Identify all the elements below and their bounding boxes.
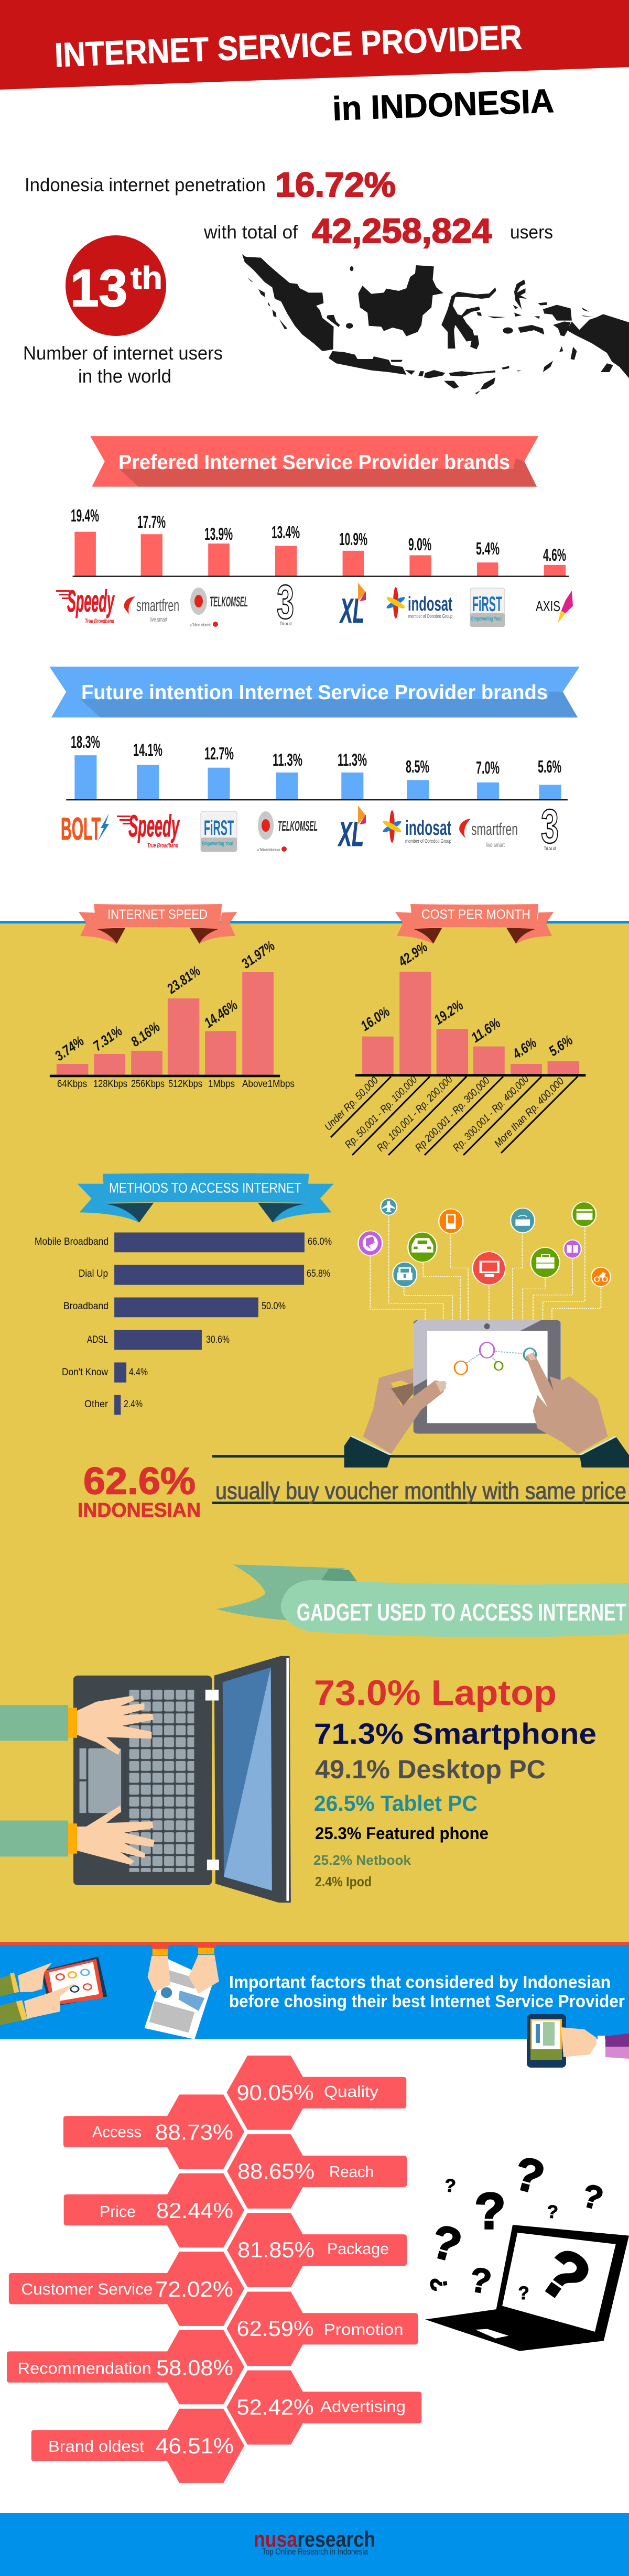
total users statistic: users [510, 221, 553, 243]
icon: briefcase [530, 1247, 560, 1277]
illustration: laptop with question marks: ? [527, 2233, 603, 2318]
yellow background panel [0, 923, 629, 1942]
ribbon: cost per month [395, 904, 554, 944]
hexagon factors: left column: 46.51% [156, 2433, 234, 2458]
illustration: laptop with question marks: ? [578, 2177, 607, 2218]
illustration: laptop with question marks: ? [426, 2214, 467, 2272]
bar chart: preferred brands [71, 506, 569, 577]
ribbon: cost per month: COST PER MONTH [421, 907, 530, 922]
penetration statistic [25, 165, 396, 204]
illustration: laptop with question marks: ? [509, 2146, 550, 2204]
bar chart: future intention: 5.6% [538, 757, 561, 776]
gadget usage list: 25.3% Featured phone [315, 1824, 489, 1843]
illustration: hands on report [145, 1945, 219, 2039]
footer [0, 2513, 629, 2576]
ribbon: gadget used [216, 1564, 629, 1637]
bar chart: internet speed: Above1Mbps [242, 1079, 295, 1090]
bar chart: preferred brands: 10.9% [339, 529, 367, 549]
rank badge: th [131, 260, 162, 296]
bar chart: access methods: 30.6% [206, 1334, 230, 1345]
bar chart: access methods: Dial Up [79, 1268, 108, 1279]
gadget usage list: 25.2% Netbook [313, 1852, 411, 1868]
right hand [526, 1352, 629, 1468]
tablet body [413, 1320, 561, 1434]
red divider line [0, 1942, 629, 1945]
hexagon factors: left column: 82.44% [156, 2198, 233, 2223]
logo: Speedy [56, 584, 115, 625]
brand logos row 2: TELKOMSEL [278, 818, 318, 834]
hexagon factors: right column [226, 2056, 421, 2444]
title line 1: INTERNET SERVICE PROVIDER [54, 18, 523, 74]
bar chart: future intention [66, 732, 568, 800]
bar chart: access methods: 65.8% [307, 1268, 330, 1279]
title banner [0, 0, 629, 127]
illustration: hand holding phone [527, 2014, 629, 2068]
bar chart: internet speed: 512Kbps [168, 1079, 202, 1090]
logo: Telkomsel [257, 811, 318, 852]
logo: smartfren [459, 819, 518, 849]
logo: Bolt: BOLT [61, 811, 101, 846]
logo: Indosat: member of Ooredoo Group [405, 839, 451, 844]
bar chart: internet speed: 1Mbps [208, 1079, 235, 1090]
logo: Speedy: True Broadband [85, 617, 114, 625]
blue divider line [0, 921, 629, 923]
logo: Speedy [117, 809, 180, 849]
bar chart: internet speed: 3.74% [52, 1033, 87, 1064]
bar chart: access methods: Mobile Broadband [35, 1236, 109, 1247]
left hand [344, 1368, 447, 1468]
hexagon factors: left column: 88.73% [155, 2120, 233, 2145]
gadget usage list: 73.0% Laptop [314, 1673, 557, 1713]
bar chart: access methods: Other [84, 1399, 109, 1410]
voucher statistic: 62.6% [83, 1460, 196, 1502]
banner heading: Important factors that considered by Indonesian [229, 1972, 611, 1992]
gadget usage list [313, 1673, 597, 1889]
brand logos row 1 [56, 575, 573, 630]
logo: Tri: 3 [277, 575, 294, 629]
illustration: laptop with question marks [425, 2146, 629, 2351]
voucher statistic [78, 1455, 629, 1521]
hexagon factors: left column: Price [100, 2202, 136, 2221]
brand logos row 1: Speedy [67, 584, 115, 618]
illustration: laptop with question marks: ? [444, 2175, 457, 2197]
illustration: laptop with hands [0, 1656, 291, 1903]
hexagon factors: right column: Package [327, 2240, 389, 2258]
rank badge [66, 235, 166, 336]
bar chart: access methods: 4.4% [129, 1367, 148, 1378]
lower hand [0, 1806, 155, 1865]
bar chart: access methods: Broadband [63, 1301, 109, 1312]
bar chart: cost per month: 11.6% [469, 1015, 503, 1046]
hexagon factors: right column: Reach [329, 2162, 374, 2181]
bar chart: cost per month: More than Rp. 400,000 [492, 1075, 566, 1150]
illustration: laptop with question marks: ? [518, 2283, 529, 2303]
laptop base [73, 1676, 212, 1885]
logo: Axis: AXIS [536, 598, 560, 614]
hexagon factors: right column: Quality [324, 2082, 379, 2101]
bar chart: access methods [35, 1233, 332, 1415]
icon: keyboard [511, 1208, 535, 1233]
bar chart: cost per month: Under Rp. 50,000 [322, 1075, 381, 1133]
ribbon: future intention [49, 667, 580, 718]
ribbon: internet speed: INTERNET SPEED [107, 907, 208, 922]
icon: motorbike [591, 1267, 611, 1287]
logo: Tri: Tri.co.id [280, 621, 291, 626]
bar chart: cost per month [322, 939, 585, 1155]
icon: card [572, 1202, 596, 1226]
rank caption: in the world [78, 365, 171, 387]
laptop screen [205, 1656, 291, 1903]
ribbon: methods to access internet [78, 1173, 334, 1223]
bar chart: internet speed [50, 938, 295, 1090]
logo: First Media: FiRST [472, 593, 502, 616]
bar chart: preferred brands: 19.4% [71, 506, 99, 525]
blue factors banner [0, 1945, 629, 2039]
bar chart: internet speed: 23.81% [164, 963, 203, 997]
bar chart: internet speed: 128Kbps [93, 1079, 127, 1090]
hexagon factors: left column: Access [92, 2123, 142, 2141]
logo: Tri [277, 575, 294, 629]
map of Indonesia [242, 254, 629, 395]
logo: Indosat [385, 587, 452, 619]
bar chart: cost per month: 4.6% [509, 1035, 539, 1062]
logo: Axis [536, 591, 573, 623]
brand logos row 2 [61, 800, 559, 853]
logo: First Media: Empowering You! [202, 841, 233, 847]
bar chart: internet speed: 31.97% [238, 938, 278, 972]
brand logos row 1: TELKOMSEL [210, 594, 248, 610]
logo: Bolt [61, 811, 109, 846]
total users statistic: 42,258,824 [312, 211, 492, 250]
logo: smartfren: smartfren [136, 596, 179, 615]
banner heading [229, 1972, 625, 2010]
bar chart: internet speed: 14.46% [201, 997, 241, 1031]
tablet screen nodes [454, 1342, 536, 1374]
hexagon factors: left column: 58.08% [156, 2355, 233, 2380]
logo: XL [339, 583, 366, 630]
logo: smartfren [124, 596, 179, 623]
icon: globe [358, 1231, 382, 1255]
logo: Tri: Tri.co.id [544, 846, 556, 851]
bar chart: internet speed: 7.31% [90, 1023, 125, 1054]
logo: smartfren: smartfren [471, 820, 518, 839]
hexagon factors: left column: Customer Service [21, 2280, 153, 2298]
bar chart: preferred brands: 13.9% [204, 524, 233, 544]
logo: Tri [541, 800, 559, 853]
logo: Telkomsel: a Telkom Indonesia [257, 847, 280, 852]
hexagon factors: right column: 62.59% [237, 2316, 313, 2341]
logo: Indosat: indosat [405, 817, 451, 840]
ribbon: preferred brands [90, 436, 538, 487]
bar chart: cost per month: 19.2% [431, 997, 466, 1028]
hexagon factors: left column: 72.02% [155, 2277, 233, 2301]
logo: smartfren: live smart [486, 841, 505, 849]
total users statistic [203, 211, 553, 250]
icon: phone [439, 1209, 463, 1234]
hexagon factors: right column: 90.05% [237, 2080, 313, 2105]
icon: lock [393, 1262, 417, 1287]
hexagon factors: left column [7, 2094, 244, 2483]
gadget usage list: 2.4% Ipod [315, 1874, 372, 1889]
logo: XL [338, 806, 366, 853]
illustration: laptop with question marks: ? [467, 2259, 494, 2301]
logo: Indosat [382, 810, 451, 844]
logo: Tri: 3 [541, 800, 559, 853]
bar chart: future intention: 7.0% [476, 758, 500, 777]
bar chart: future intention: 18.3% [71, 732, 100, 752]
rank badge: 13 [70, 259, 127, 318]
total users statistic: with total of [203, 221, 298, 243]
logo: Telkomsel [190, 588, 248, 627]
bar chart: future intention: 11.3% [338, 750, 367, 769]
bar chart: access methods: 66.0% [308, 1236, 332, 1247]
ribbon: future intention: Future intention Internet Service Provider brands [81, 681, 548, 704]
ribbon: internet speed [79, 904, 237, 944]
bar chart: internet speed: 8.16% [128, 1019, 163, 1050]
rank caption: Number of internet users [23, 342, 223, 364]
bar chart: preferred brands: 13.4% [272, 523, 300, 542]
ribbon: methods to access internet: METHODS TO ACCESS INTERNET [109, 1180, 301, 1196]
logo: Indosat: member of Ooredoo Group [408, 614, 452, 619]
bar chart: internet speed: 64Kbps [57, 1079, 87, 1090]
icon: car [408, 1232, 437, 1262]
bar chart: access methods: 50.0% [262, 1301, 286, 1312]
bar chart: future intention: 8.5% [406, 757, 429, 776]
logo: Telkomsel: a Telkom Indonesia [190, 623, 211, 627]
bar chart: preferred brands: 9.0% [408, 535, 431, 554]
logo: First Media [470, 588, 505, 627]
icon: airplane [381, 1199, 397, 1215]
title line 2: in INDONESIA [332, 82, 555, 127]
hexagon factors: right column: 81.85% [237, 2237, 314, 2262]
hexagon factors: left column: Brand oldest [48, 2437, 144, 2455]
logo: First Media: Empowering You! [471, 616, 502, 622]
bar chart: cost per month: 42.9% [395, 939, 430, 970]
rank caption [23, 342, 223, 387]
bar chart: cost per month: Rp. 300,001 - Rp. 400,000 [451, 1073, 531, 1154]
ribbon: preferred brands: Prefered Internet Service Provider brands [118, 451, 510, 474]
hexagon factors: left column: Recommendation [18, 2359, 151, 2377]
logo: First Media [201, 811, 237, 852]
hexagon factors: right column: Advertising [320, 2397, 406, 2416]
gadget usage list: 49.1% Desktop PC [315, 1755, 546, 1784]
hexagon factors: right column: 88.65% [237, 2159, 314, 2183]
illustration: laptop with question marks: ? [546, 2201, 559, 2223]
penetration statistic: 16.72% [275, 165, 396, 204]
logo: Indosat: indosat [408, 593, 452, 615]
upper hand [0, 1695, 154, 1755]
bar chart: cost per month: Rp. 50,001 - Rp. 100,000 [343, 1074, 419, 1151]
icon: monitor [473, 1252, 505, 1285]
bar chart: access methods: 2.4% [124, 1399, 143, 1410]
logo: XL: XL [338, 814, 364, 853]
illustration: tablet with app icons [344, 1199, 629, 1468]
illustration: laptop with question marks: ? [474, 2182, 506, 2240]
bar chart: preferred brands: 5.4% [476, 539, 500, 558]
gadget usage list: 71.3% Smartphone [314, 1717, 597, 1750]
dotted connectors [370, 1215, 601, 1320]
logo: smartfren: live smart [150, 616, 167, 623]
illustration: laptop with question marks: ? [425, 2275, 453, 2293]
footer logo: nusaresearch [254, 2527, 375, 2551]
bar chart: internet speed: 256Kbps [131, 1079, 165, 1090]
bar chart: cost per month: Rp 200,001 - Rp. 300,000 [413, 1075, 492, 1154]
illustration: hands on tablet [0, 1957, 107, 2025]
bar chart: future intention: 12.7% [204, 744, 234, 763]
gadget usage list: 26.5% Tablet PC [314, 1791, 478, 1816]
hexagon factors: right column: Promotion [324, 2320, 404, 2339]
bar chart: cost per month: 16.0% [358, 1004, 393, 1034]
bar chart: preferred brands: 17.7% [137, 512, 166, 531]
hexagon factors: right column: 52.42% [237, 2395, 313, 2419]
bar chart: future intention: 14.1% [133, 740, 162, 759]
bar chart: preferred brands: 4.6% [543, 545, 566, 564]
voucher statistic: INDONESIAN [78, 1499, 201, 1521]
penetration statistic: Indonesia internet penetration [25, 174, 266, 195]
brand logos row 2: Speedy [128, 809, 180, 843]
bar chart: future intention: 11.3% [273, 750, 302, 769]
logo: Speedy: True Broadband [147, 842, 178, 849]
bar chart: cost per month: Rp. 100,001 - Rp. 200,000 [375, 1074, 455, 1154]
logo: XL: XL [339, 591, 364, 630]
bar chart: cost per month: 5.6% [546, 1032, 576, 1059]
logo: First Media: FiRST [204, 817, 234, 840]
bar chart: access methods: ADSL [87, 1334, 108, 1345]
bar chart: access methods: Don't Know [62, 1367, 108, 1378]
footer tagline: Top Online Research in Indonesia [262, 2547, 368, 2557]
icon: speakers [563, 1240, 581, 1258]
